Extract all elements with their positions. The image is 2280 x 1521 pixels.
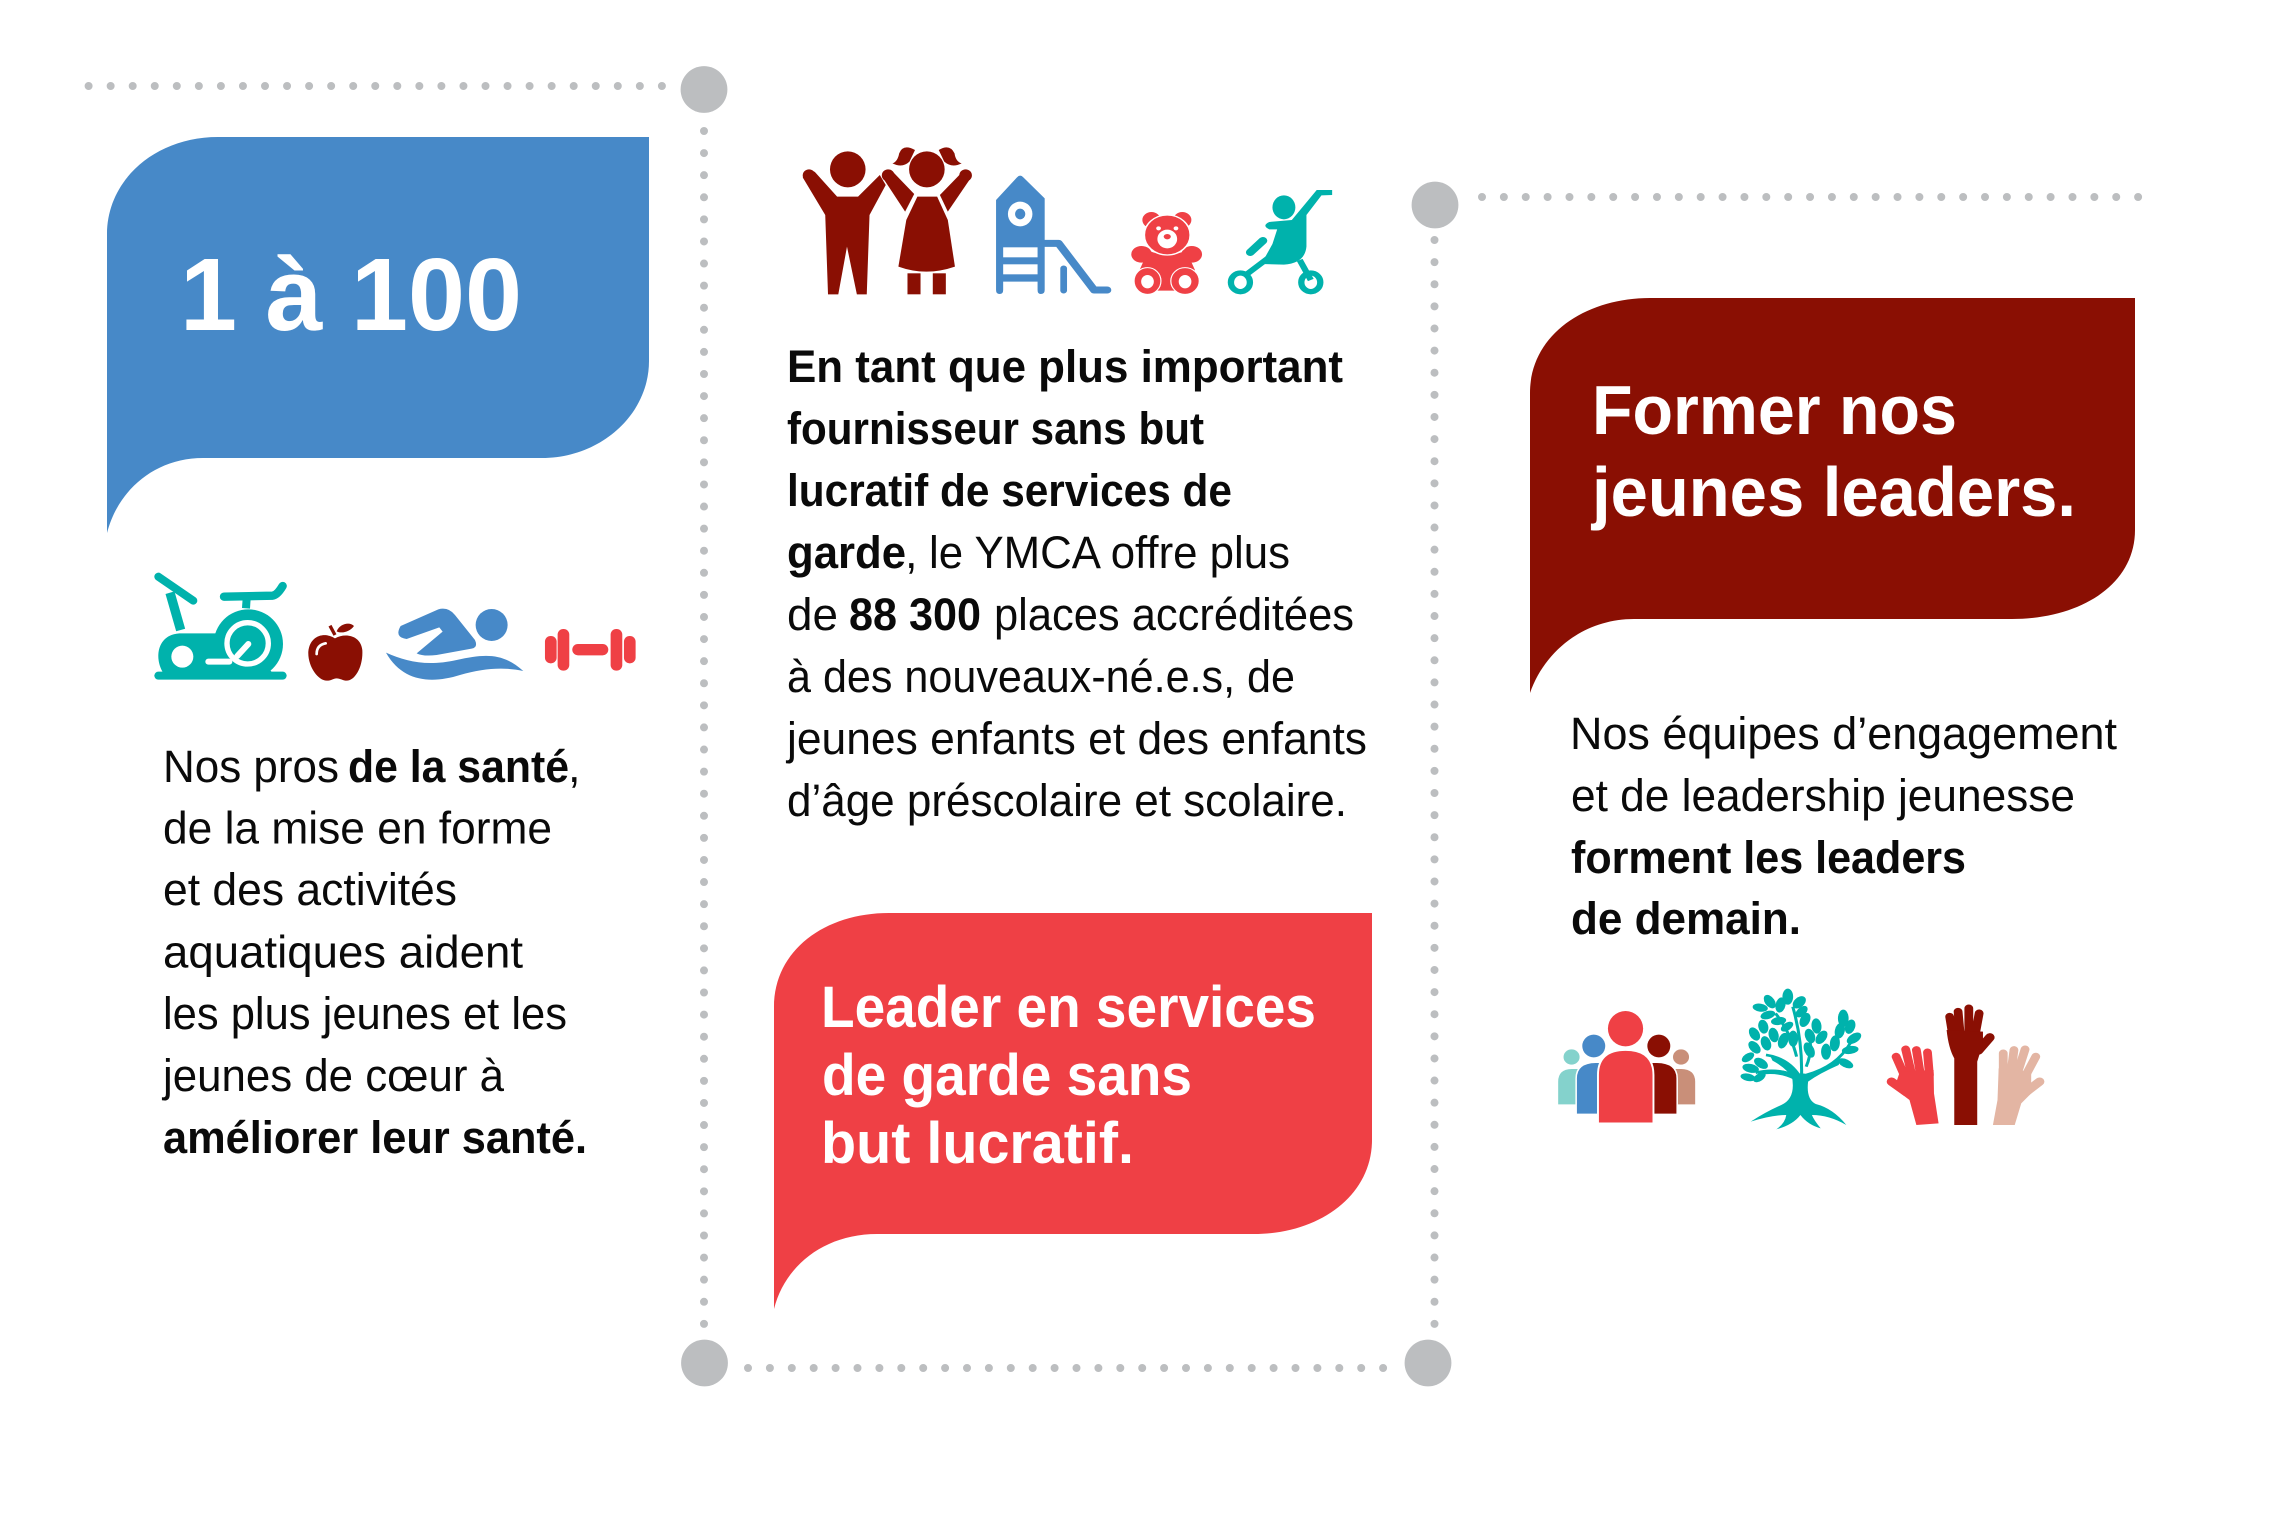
text block: santé: , xyxy=(568,741,581,792)
text block: leadership jeunesse: forment les leaders xyxy=(1571,832,1966,883)
text block: services de garde: d’âge préscolaire et scolaire. xyxy=(787,775,1347,826)
icon: dumbbell xyxy=(545,629,636,671)
text block: santé: les plus jeunes et les xyxy=(163,988,567,1039)
text block: services de garde: de xyxy=(787,589,838,640)
text block: services de garde: En tant que plus important xyxy=(787,341,1343,392)
text block: santé: jeunes de cœur à xyxy=(161,1050,505,1101)
icon: tree xyxy=(1740,989,1864,1129)
icon: exercise bike xyxy=(158,577,283,679)
icon: raised hands xyxy=(1892,1008,2040,1125)
text block: services de garde: jeunes enfants et des enfants xyxy=(785,713,1367,764)
panel: red speech bubble xyxy=(774,913,1372,1309)
text block: santé xyxy=(161,741,587,1163)
icon: playground slide xyxy=(996,176,1107,294)
icon: teddy bear xyxy=(1131,212,1202,294)
text block: services de garde: à des nouveaux-né.e.s, de xyxy=(787,651,1295,702)
text block: santé: de la mise en forme xyxy=(163,802,552,854)
icon: apple xyxy=(308,624,362,681)
heading: 1 à 100: 1 à 100 xyxy=(180,237,522,352)
text block: leadership jeunesse: Nos équipes d’engagement xyxy=(1570,708,2117,759)
panel: red speech bubble: but lucratif. xyxy=(821,1111,1134,1176)
text block: services de garde: fournisseur sans but xyxy=(787,403,1204,454)
text block: services de garde: garde xyxy=(787,527,906,578)
panel: red speech bubble: de garde sans xyxy=(822,1043,1192,1108)
text block: santé: de la santé xyxy=(348,741,569,792)
heading: Former nos jeunes leaders: Former nos xyxy=(1592,371,1957,449)
text block: services de garde: , xyxy=(905,527,918,578)
icon: swimmer xyxy=(386,609,523,680)
text block: services de garde: places accréditées xyxy=(994,589,1354,640)
panel: blue speech bubble xyxy=(107,137,649,533)
heading: Leader en services: Leader en services xyxy=(821,975,1316,1040)
text block: santé: Nos pros xyxy=(163,741,339,792)
text block: leadership jeunesse: de demain. xyxy=(1571,893,1801,944)
text block: leadership jeunesse: et de leadership jeunesse xyxy=(1571,770,2075,821)
text block: services de garde: lucratif de services de xyxy=(787,465,1232,516)
icon: boy and girl xyxy=(803,147,972,294)
text block: santé: et des activités xyxy=(163,864,457,915)
icon: stroller xyxy=(1231,190,1332,292)
text block: santé: aquatiques aident xyxy=(163,926,523,978)
panel: maroon speech bubble xyxy=(1530,298,2135,693)
icons: childcare row xyxy=(803,147,1332,294)
icon: group of people xyxy=(1558,1011,1695,1123)
text block: services de garde: le YMCA offre plus xyxy=(929,527,1290,578)
icons: leadership row xyxy=(1558,989,2040,1129)
text block: leadership jeunesse xyxy=(1570,708,2117,944)
dotted connector frame xyxy=(89,66,2139,1386)
text block: santé: améliorer leur santé. xyxy=(163,1112,587,1163)
panel: maroon speech bubble: jeunes leaders. xyxy=(1590,453,2076,531)
text block: services de garde: 88 300 xyxy=(849,589,981,640)
icons: fitness row xyxy=(158,577,636,681)
text block: services de garde xyxy=(785,341,1367,826)
